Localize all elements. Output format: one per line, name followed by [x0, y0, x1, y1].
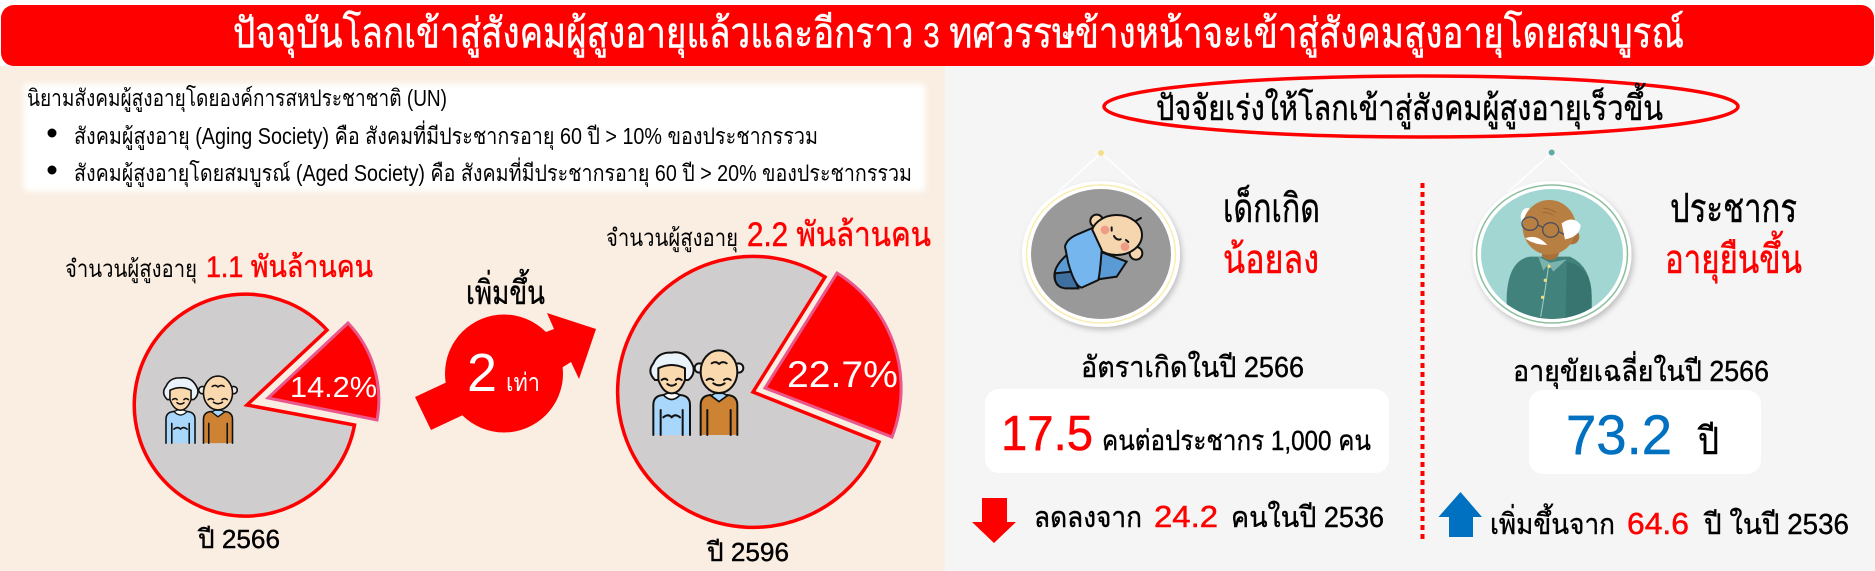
arrow: increase — [1438, 492, 1482, 537]
label: birth rate: อัตราเกิดในปี 2566 — [1081, 350, 1304, 384]
heading: fewer births: เด็กเกิด — [1223, 184, 1320, 231]
card: life expectancy value — [1529, 390, 1761, 474]
definition: aged society: สังคมผู้สูงอายุโดยสมบูรณ์ (Aged Society) คือ สังคมที่มีประชากรอายุ 60 ปี > 20% ของประชากรรวม — [74, 157, 912, 187]
label: year 2566: ปี 2566 — [197, 524, 280, 554]
heading: longer lives: อายุยืนขึ้น — [1665, 230, 1802, 284]
red slice 14.2% — [268, 323, 379, 420]
text: decrease from 24.2: ลดลงจาก — [1034, 502, 1142, 534]
bullet — [48, 166, 56, 174]
label: life expectancy: อายุขัยเฉลี่ยในปี 2566 — [1513, 351, 1769, 389]
arrow: decrease — [972, 498, 1016, 543]
value: 2 times: 2 — [467, 343, 497, 403]
label: elderly count 2566 — [65, 251, 373, 284]
card: birth rate value — [985, 389, 1389, 473]
text: decrease from 24.2: คนในปี 2536 — [1231, 500, 1384, 534]
text: decrease from 24.2: 24.2 — [1154, 499, 1218, 534]
label: increase: เพิ่มขึ้น — [466, 269, 545, 311]
heading: longer lives — [1665, 187, 1802, 284]
title banner — [1, 5, 1874, 66]
value 14.2%: 14.2% — [290, 372, 377, 404]
pie chart 2596 — [618, 256, 901, 527]
label: elderly count 2596: 2.2 พันล้านคน — [747, 216, 931, 254]
icon: hanging elder portrait — [1472, 150, 1632, 327]
divider — [1420, 183, 1424, 543]
icon: elderly couple large — [650, 350, 743, 435]
panel: UN definition — [24, 84, 925, 191]
text: increase from 64.6 — [1490, 503, 1849, 541]
text: increase from 64.6: เพิ่มขึ้นจาก — [1490, 503, 1615, 541]
label: elderly count 2596 — [606, 216, 931, 254]
heading: fewer births: น้อยลง — [1223, 238, 1319, 282]
grey slice — [618, 256, 879, 527]
value 73.2: 73.2 — [1566, 403, 1672, 466]
unit: years: ปี — [1697, 421, 1719, 463]
heading: accelerating factors — [1104, 76, 1738, 137]
icon: elderly couple small — [164, 376, 237, 443]
text: decrease from 24.2 — [1034, 499, 1384, 534]
label: elderly count 2566: จำนวนผู้สูงอายุ — [65, 256, 197, 284]
arrow: two-fold increase — [415, 313, 596, 432]
value 22.7%: 22.7% — [787, 354, 898, 395]
unit: times: เท่า — [506, 369, 540, 397]
label: year 2596: ปี 2596 — [706, 537, 789, 567]
heading: longer lives: ประชากร — [1670, 187, 1797, 231]
unit: คนต่อประชากร 1,000 คน — [1102, 425, 1371, 456]
heading: accelerating factors: ปัจจัยเร่งให้โลกเข้าสู่สังคมผู้สูงอายุเร็วขึ้น — [1156, 82, 1663, 129]
definition: aging society: สังคมผู้สูงอายุ (Aging Society) คือ สังคมที่มีประชากรอายุ 60 ปี > 10% ของประชากรรวม — [74, 120, 818, 150]
heading: fewer births — [1223, 184, 1320, 282]
label: elderly count 2596: จำนวนผู้สูงอายุ — [606, 225, 738, 253]
value 17.5: 17.5 — [1001, 407, 1093, 461]
bullet — [48, 128, 56, 138]
grey slice — [134, 294, 354, 516]
red slice 22.7% — [765, 273, 901, 437]
panel: left background — [0, 66, 945, 571]
text: increase from 64.6: ปี ในปี 2536 — [1704, 507, 1849, 541]
definition heading: นิยามสังคมผู้สูงอายุโดยองค์การสหประชาชาติ (UN) — [27, 85, 447, 112]
title: ปัจจุบันโลกเข้าสู่สังคมผู้สูงอายุแล้วและอีกราว 3 ทศวรรษข้างหน้าจะเข้าสู่สังคมสูงอายุโดยสมบูรณ์ — [233, 10, 1684, 58]
label: elderly count 2566: 1.1 พันล้านคน — [206, 251, 373, 284]
text: increase from 64.6: 64.6 — [1627, 506, 1689, 541]
pie chart 2566 — [134, 294, 379, 516]
icon: hanging baby portrait — [1022, 150, 1180, 327]
panel: right background — [945, 66, 1875, 571]
